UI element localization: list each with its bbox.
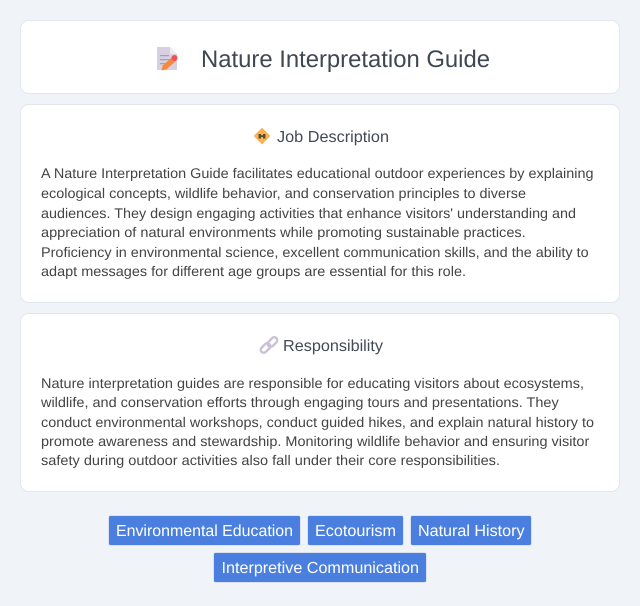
- text block: job description: appreciation of natural environments while promoting sustainable practices.: [41, 224, 526, 240]
- text block: job description: Proficiency in environmental science, excellent communication skills, and the ability to: [41, 244, 589, 260]
- text block: responsibility: wildlife, and conservation efforts through engaging tours and presentations. They: [40, 394, 559, 410]
- icon: diamond sign: [254, 128, 270, 144]
- text block: responsibility: promote awareness and stewardship. Monitoring wildlife behavior and ensuring visitor: [41, 433, 590, 449]
- tag: interpretive communication: [214, 552, 426, 582]
- tag: natural history: [410, 516, 532, 546]
- icon: document with pencil: [157, 47, 178, 70]
- tag: ecotourism: [308, 516, 404, 546]
- tags: [108, 516, 532, 582]
- text block: job description: adapt messages for different age groups are essential for this role.: [41, 263, 466, 279]
- tag: interpretive communication: Interpretive Communication: [222, 560, 419, 577]
- text block: responsibility: conduct environmental workshops, conduct guided hikes, and explain natural history to: [41, 414, 594, 430]
- text block: job description: [41, 165, 594, 279]
- text block: job description: audiences. They design engaging activities that enhance visitors' understanding and: [41, 205, 576, 221]
- title: Nature Interpretation Guide: [201, 46, 490, 73]
- heading: job description: Job Description: [277, 129, 389, 146]
- tag: ecotourism: Ecotourism: [315, 523, 396, 540]
- tag: natural history: Natural History: [418, 523, 524, 540]
- text block: job description: A Nature Interpretation Guide facilitates educational outdoor experiences by explaining: [41, 165, 594, 181]
- text block: responsibility: [40, 375, 594, 468]
- text block: responsibility: Nature interpretation guides are responsible for educating visitors about ecosystems,: [41, 375, 584, 391]
- panel: title card: [20, 20, 620, 94]
- tag: environmental education: Environmental Education: [116, 523, 293, 540]
- panel: job description: [20, 104, 620, 302]
- icon: chain link: [259, 336, 279, 354]
- text block: job description: ecological concepts, wildlife behavior, and conservation principles to diverse: [41, 185, 526, 201]
- panel: responsibility: [20, 314, 620, 492]
- text block: responsibility: safety during outdoor activities also fall under their core responsibilities.: [41, 452, 500, 468]
- tag: environmental education: [108, 516, 300, 546]
- heading: responsibility: Responsibility: [283, 338, 383, 355]
